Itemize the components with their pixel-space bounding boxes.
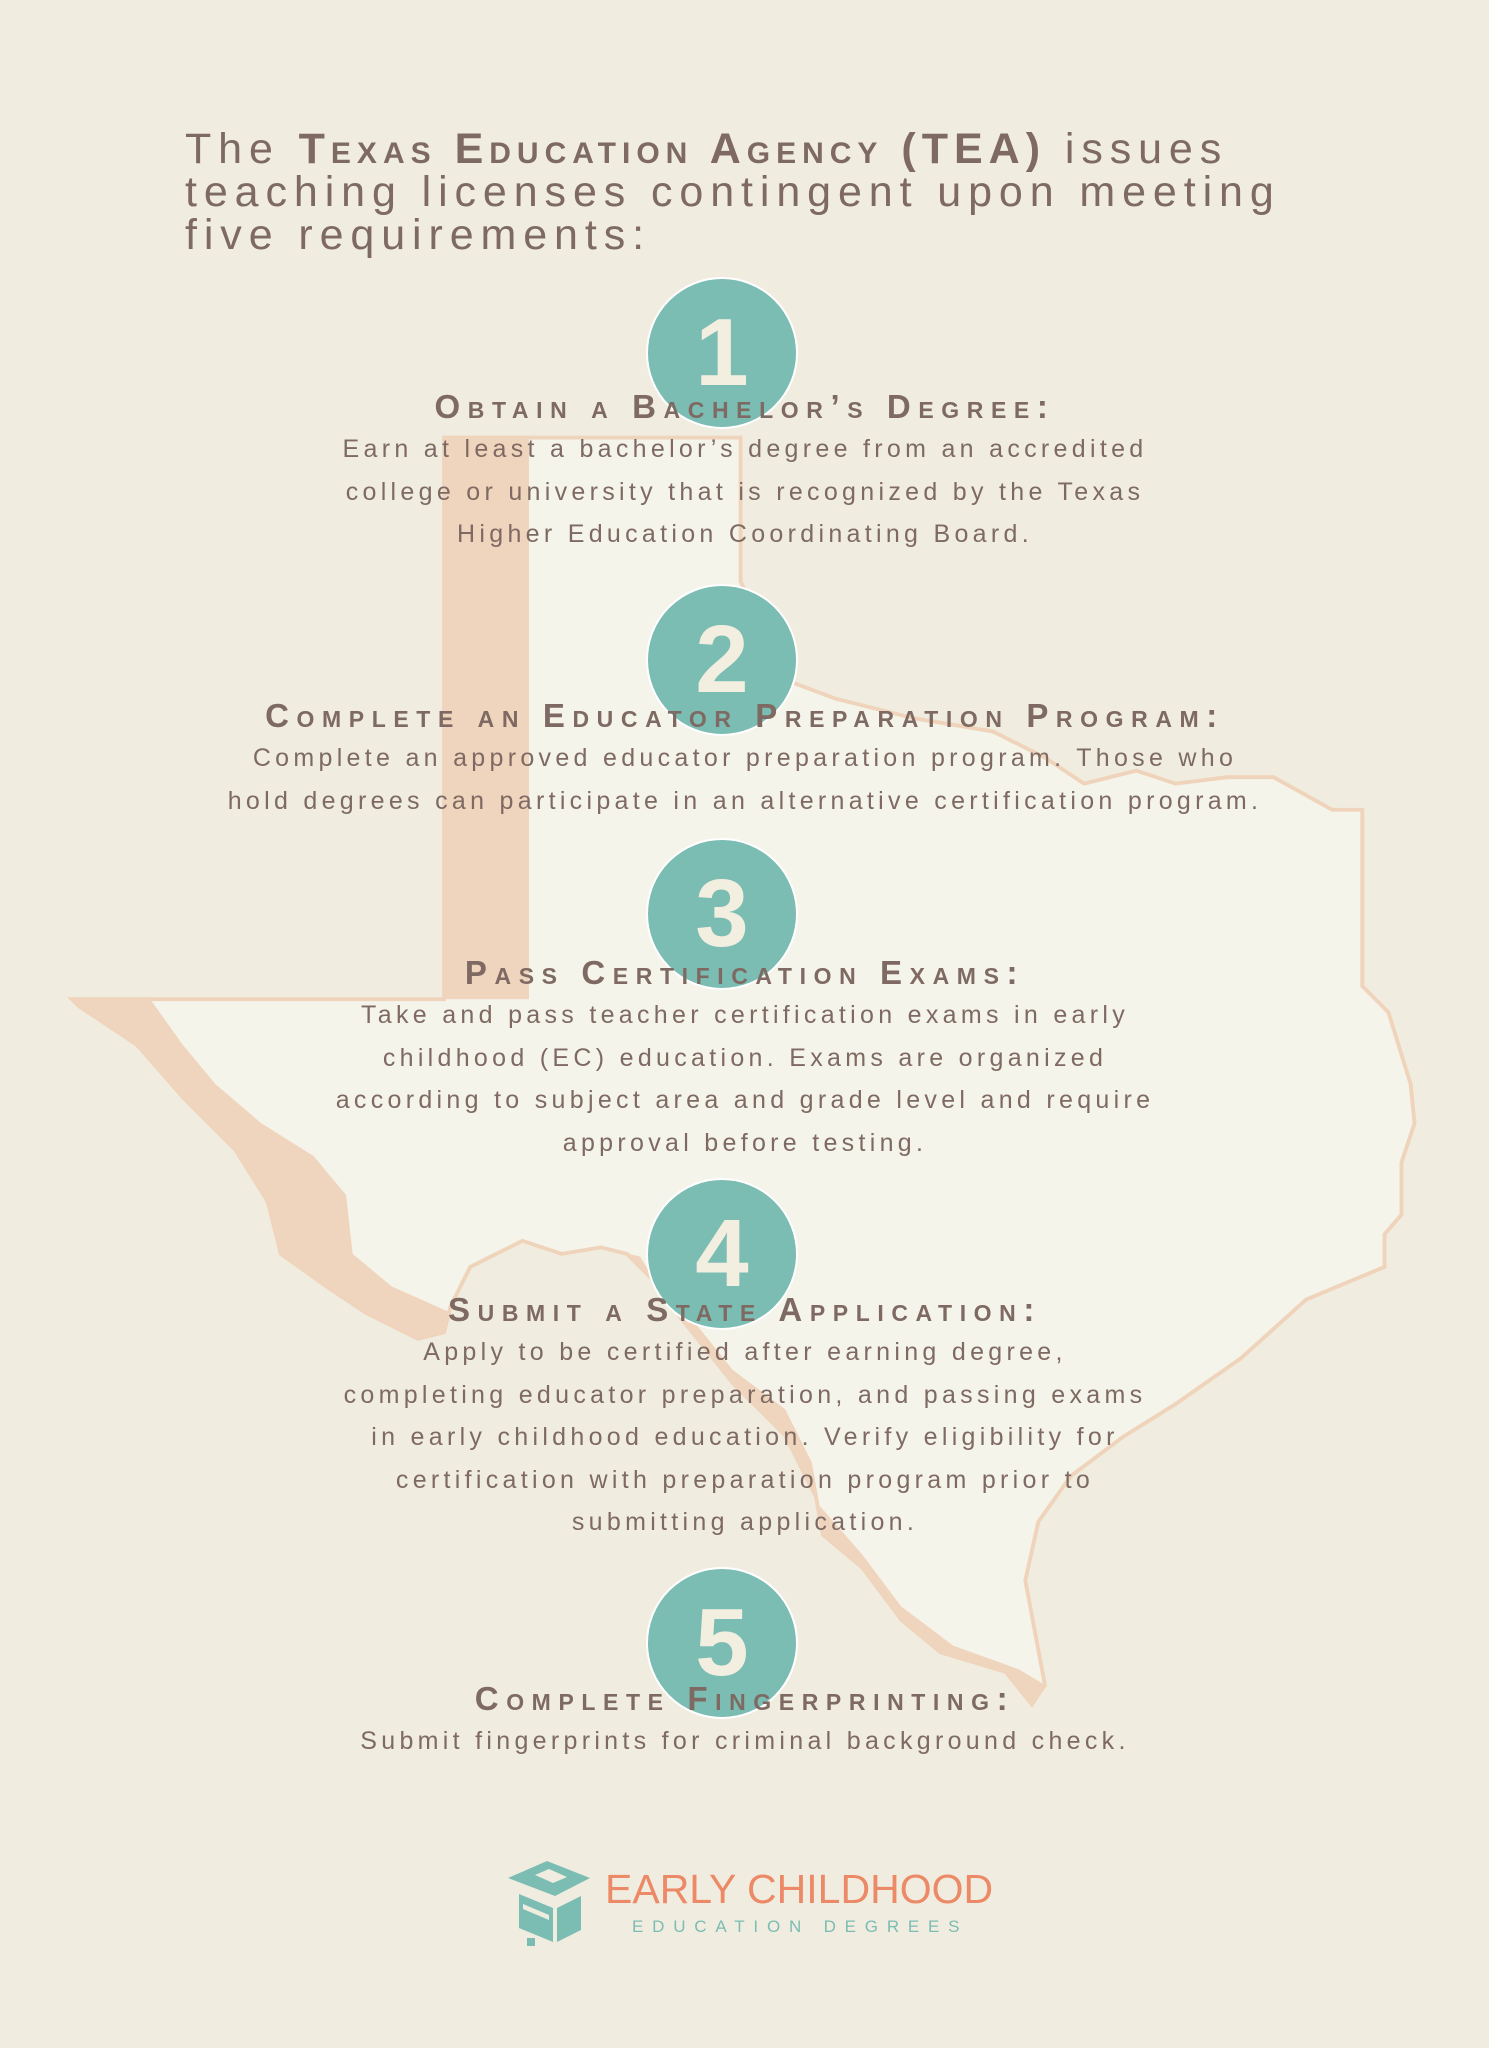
- step 3 circle: [646, 838, 798, 990]
- step 1 text: Higher Education Coordinating Board.: [457, 520, 1033, 548]
- step 2 text: [228, 697, 1262, 814]
- step 1 text: Obtain a Bachelor’s Degree:: [435, 388, 1055, 425]
- step 4 text: Apply to be certified after earning degree,: [423, 1338, 1067, 1366]
- step 2 text: hold degrees can participate in an alternative certification program.: [228, 786, 1262, 814]
- step 3 circle: 3: [695, 860, 749, 967]
- icon: graduation cap: [508, 1861, 590, 1946]
- step 5 text: Complete Fingerprinting:: [475, 1680, 1015, 1717]
- step 4 text: certification with preparation program prior to: [396, 1466, 1094, 1494]
- step 3 text: according to subject area and grade level and require: [336, 1086, 1154, 1114]
- step 4 text: Submit a State Application:: [448, 1291, 1042, 1328]
- title: The Texas Education Agency (TEA) issues: [185, 125, 1228, 173]
- step 3 text: Pass Certification Exams:: [465, 954, 1025, 991]
- title: [185, 125, 1281, 259]
- step 1 text: college or university that is recognized by the Texas: [346, 478, 1144, 506]
- step 4 text: in early childhood education. Verify eligibility for: [371, 1423, 1119, 1451]
- step 5 text: [360, 1680, 1130, 1755]
- step 4 text: [344, 1291, 1146, 1536]
- step 1 text: Earn at least a bachelor’s degree from an accredited: [343, 435, 1147, 463]
- step 2 circle: 2: [695, 606, 749, 713]
- title: five requirements:: [185, 211, 651, 259]
- step 4 circle: [646, 1178, 798, 1330]
- step 5 circle: [646, 1567, 798, 1719]
- logo: EDUCATION DEGREES: [632, 1917, 968, 1936]
- step 4 text: completing educator preparation, and passing exams: [344, 1380, 1146, 1408]
- step 3 text: approval before testing.: [563, 1128, 927, 1156]
- step 1 text: [343, 388, 1147, 548]
- step 5 text: Submit fingerprints for criminal background check.: [360, 1727, 1130, 1755]
- step 3 text: [336, 954, 1154, 1156]
- step 2 text: Complete an Educator Preparation Program:: [265, 697, 1225, 734]
- logo text: EARLY CHILDHOOD: [605, 1866, 993, 1912]
- title: teaching licenses contingent upon meeting: [185, 168, 1281, 216]
- step 1 circle: [646, 277, 798, 429]
- step 4 circle: 4: [695, 1200, 749, 1307]
- step 3 text: childhood (EC) education. Exams are organized: [383, 1044, 1107, 1072]
- step 2 text: Complete an approved educator preparation program. Those who: [253, 744, 1237, 772]
- step 3 text: Take and pass teacher certification exams in early: [361, 1001, 1129, 1029]
- step 5 circle: 5: [695, 1589, 749, 1696]
- logo: [508, 1861, 993, 1946]
- step 1 circle: 1: [695, 299, 749, 406]
- step 2 circle: [646, 584, 798, 736]
- step 4 text: submitting application.: [572, 1508, 918, 1536]
